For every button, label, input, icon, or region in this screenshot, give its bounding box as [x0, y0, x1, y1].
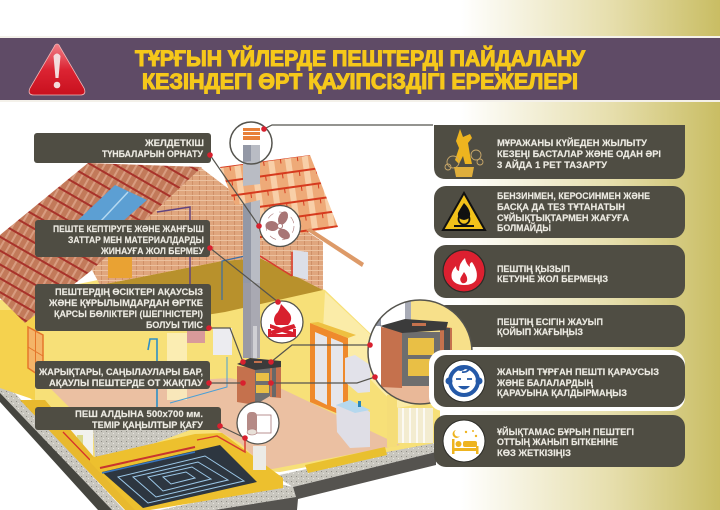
label: vents: ТҮНБАЛАРЫН ОРНАТУ — [102, 149, 203, 160]
panel: before sleep: ҰЙЫҚТАМАС БҰРЫН ПЕШТЕГІ — [497, 426, 634, 438]
icon: child face — [443, 360, 485, 402]
roof strip behind chimney — [243, 160, 260, 186]
panel: before sleep — [434, 415, 685, 467]
panel: do not leave — [429, 350, 685, 411]
panel: do not leave: ЖАНЫП ТҰРҒАН ПЕШТІ ҚАРАУСЫЗ — [496, 367, 659, 378]
panel: flammable liquids: БАСҚА ДА ТЕЗ ТҰТАНАТЫН — [497, 202, 625, 213]
foundation — [0, 387, 436, 510]
panel: overheating: КЕТУІНЕ ЖОЛ БЕРМЕҢІЗ — [497, 274, 608, 285]
panel: overheating — [434, 245, 685, 298]
callout: flame circle — [261, 299, 303, 343]
label: drying fuel: ЗАТТАР МЕН МАТЕРИАЛДАРДЫ — [68, 235, 204, 246]
label: flues and partitions: ЖӘНЕ ҚҰРЫЛЫМДАРДАН ӨРТКЕ — [48, 298, 203, 309]
title: КЕЗІНДЕГІ ӨРТ ҚАУІПСІЗДІГІ ЕРЕЖЕЛЕРІ — [142, 69, 578, 94]
icon: flame in red circle — [443, 250, 485, 292]
icon: chimney sweep figure — [445, 129, 483, 177]
label: drying fuel — [35, 220, 213, 257]
right brick wall — [260, 232, 323, 290]
white column right — [253, 446, 266, 470]
label: vents: ЖЕЛДЕТКІШ — [144, 138, 204, 149]
label: drying fuel: ПЕШТЕ КЕПТІРУГЕ ЖӘНЕ ЖАНҒЫШ — [53, 224, 204, 235]
door — [310, 322, 356, 418]
eave — [306, 228, 364, 267]
panel: flammable liquids: СҰЙЫҚТЫҚТАРМЕН ЖАҒУҒА — [497, 212, 629, 224]
label: metal sheet: ТЕМІР ҚАҢЫЛТЫР ҚАҒУ — [92, 420, 203, 431]
label: cracks: АҚАУЛЫ ПЕШТЕРДЕ ОТ ЖАҚПАУ — [49, 378, 203, 389]
title banner — [0, 36, 720, 102]
label: cracks: ЖАРЫҚТАРЫ, САҢЫЛАУЛАРЫ БАР, — [38, 367, 203, 378]
stove — [237, 358, 281, 405]
panel: do not leave: ҚАРАУЫНА ҚАЛДЫРМАҢЫЗ — [497, 388, 627, 399]
label: flues and partitions: ҚАРСЫ БӨЛІКТЕРІ (ШЕГІНІСТЕРІ) — [54, 309, 203, 320]
pale partition — [167, 333, 187, 400]
panel: close door: ҚОЙЫП ЖАҒЫҢЫЗ — [497, 326, 583, 338]
callout: large stove circle — [367, 300, 478, 405]
underfloor heating frame — [90, 433, 283, 510]
panel: chimney cleaning: КЕЗЕҢІ БАСТАЛАР ЖӘНЕ ОДАН ӘРІ — [497, 149, 661, 160]
boiler — [345, 355, 370, 393]
orange attic block — [108, 257, 132, 278]
left window — [28, 327, 43, 378]
left roof — [0, 163, 202, 323]
left outer wall — [0, 310, 35, 400]
underfloor heating coils — [100, 445, 257, 508]
panel: flammable liquids: БЕНЗИНМЕН, КЕРОСИНМЕН ЖӘНЕ — [497, 191, 650, 202]
icon: warning triangle — [29, 44, 85, 95]
staircase — [387, 395, 433, 447]
icon: oxidiser warning triangle — [443, 193, 485, 230]
washing machine — [336, 400, 370, 448]
label: metal sheet: ПЕШ АЛДЫНА 500x700 мм. — [75, 409, 203, 420]
white column left — [70, 430, 93, 460]
pale back wall — [323, 292, 440, 408]
label: vents — [34, 133, 213, 163]
title: ТҰРҒЫН ҮЙЛЕРДЕ ПЕШТЕРДІ ПАЙДАЛАНУ — [135, 46, 586, 71]
panel: before sleep: ОТТЫҢ ЖАНЫП БІТКЕНІНЕ — [497, 437, 618, 448]
title — [135, 46, 586, 94]
attic window — [260, 250, 308, 280]
label: flues and partitions: БОЛУЫ ТИІС — [146, 320, 203, 331]
label: flues and partitions — [35, 284, 212, 331]
front yellow threshold — [305, 447, 387, 473]
yellow interior walls — [0, 255, 440, 472]
blue pipe attic — [222, 256, 245, 300]
callout: fan circle — [256, 206, 300, 246]
panel: flammable liquids: БОЛМАЙДЫ — [497, 222, 551, 234]
label: drying fuel: ЖИНАУҒА ЖОЛ БЕРМЕУ — [100, 246, 204, 257]
solar panel — [76, 185, 147, 222]
blue floor pipe — [170, 357, 227, 403]
panel: close door: ПЕШТІҢ ЕСІГІН ЖАУЫП — [497, 317, 603, 328]
panel: close door — [434, 305, 685, 347]
icon: bed at night — [443, 420, 485, 462]
yellow left floor band — [20, 400, 150, 510]
panel: flammable liquids — [434, 186, 685, 238]
connector lines — [209, 125, 433, 438]
pink boiler — [187, 328, 205, 343]
panel: chimney cleaning: МҰРАЖАНЫ КҮЙЕДЕН ЖЫЛЫТУ — [497, 137, 647, 149]
label: cracks — [35, 361, 212, 389]
wall boiler left — [213, 328, 232, 355]
gravel block — [93, 430, 190, 458]
house illustration — [0, 145, 440, 510]
callout: metal sheet circle — [237, 402, 279, 444]
blue water pipe — [148, 339, 157, 407]
panel: before sleep: КӨЗ ЖЕТКІЗІҢІЗ — [497, 448, 571, 459]
panel: chimney cleaning — [434, 125, 685, 179]
attic olive floor — [100, 258, 323, 330]
panel: overheating: ПЕШТІҢ ҚЫЗЫП — [497, 264, 570, 275]
label: metal sheet — [35, 407, 223, 431]
red pipes right — [197, 436, 245, 452]
right roof — [220, 155, 338, 240]
chimney — [243, 145, 260, 362]
panel: chimney cleaning: 3 АЙДА 1 РЕТ ТАЗАРТУ — [497, 159, 607, 171]
purple pipe — [157, 207, 190, 287]
panel: do not leave: ЖӘНЕ БАЛАЛАРДЫҢ — [496, 378, 593, 389]
label: flues and partitions: ПЕШТЕРДІҢ ӨСІКТЕРІ АҚАУСЫЗ — [55, 287, 203, 298]
left brick gable — [92, 167, 260, 285]
red pipe left — [63, 432, 90, 460]
stove marker dots — [240, 359, 274, 386]
callout: chimney circle — [230, 122, 272, 164]
floor — [50, 378, 400, 470]
